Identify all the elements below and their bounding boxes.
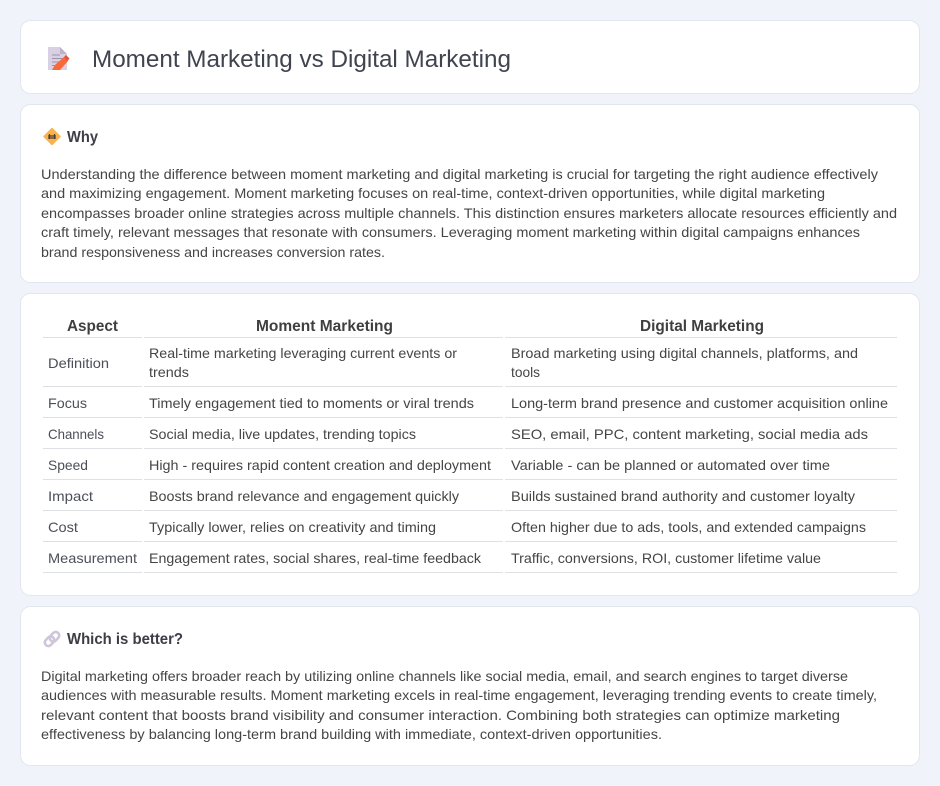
icon: document with pencil [48, 47, 70, 70]
table header: Digital Marketing [640, 318, 764, 335]
text block: which is better paragraph: effectiveness by balancing long-term brand building with immediate, context-driven opportunities. [41, 726, 662, 742]
text block: which is better paragraph: Digital marketing offers broader reach by utilizing online channels like social media, email, and search engines to target diverse [41, 668, 848, 684]
row: definition: trends [149, 364, 189, 380]
row: definition [48, 345, 858, 380]
row: definition: Definition [48, 355, 109, 371]
row: cost: Typically lower, relies on creativity and timing [149, 519, 436, 535]
text block: why paragraph: and maximizing engagement. Moment marketing focuses on real-time, context-driven opportunities, while digital marketing [41, 185, 825, 201]
row: measurement: Engagement rates, social shares, real-time feedback [149, 550, 482, 566]
row: impact: Builds sustained brand authority and customer loyalty [511, 488, 855, 504]
row: channels [48, 426, 868, 442]
row: focus: Timely engagement tied to moments or viral trends [149, 395, 474, 411]
text block: why paragraph: brand responsiveness and increases conversion rates. [41, 244, 385, 260]
table header: Moment Marketing [256, 318, 393, 335]
row: measurement: Traffic, conversions, ROI, customer lifetime value [511, 550, 821, 566]
row: speed [48, 457, 830, 473]
panel: why [20, 104, 920, 282]
icon: diamond sign [44, 128, 60, 144]
row: cost [48, 519, 866, 535]
row: definition: Broad marketing using digital channels, platforms, and [511, 345, 858, 361]
row: focus: Focus [48, 395, 87, 411]
panel: comparison table [20, 294, 920, 596]
row: impact [48, 488, 855, 504]
text block: which is better paragraph: audiences with measurable results. Moment marketing excels in real-time engagement, leveraging trending events to create timely, [41, 687, 877, 703]
text block: which is better paragraph [41, 668, 877, 742]
title: Moment Marketing vs Digital Marketing [92, 46, 511, 73]
row: impact: Boosts brand relevance and engagement quickly [149, 488, 459, 504]
heading: which is better: Which is better? [67, 631, 183, 648]
row: impact: Impact [48, 488, 93, 504]
row: speed: Variable - can be planned or automated over time [511, 457, 830, 473]
row: focus: Long-term brand presence and customer acquisition online [511, 395, 888, 411]
row: channels: Social media, live updates, trending topics [149, 426, 416, 442]
row: speed: Speed [48, 457, 88, 473]
table header: Aspect [67, 318, 119, 335]
text block: why paragraph: Understanding the difference between moment marketing and digital marketing is crucial for targeting the right audience effectively [41, 166, 878, 182]
table header [67, 318, 764, 335]
text block: which is better paragraph: relevant content that boosts brand visibility and consumer interaction. Combining both strategies can optimize marketing [41, 707, 840, 723]
heading: why: Why [67, 129, 98, 146]
text block: why paragraph: encompasses broader online strategies across multiple channels. This distinction ensures marketers allocate resources efficiently and [41, 205, 897, 221]
row: focus [48, 395, 888, 411]
row: measurement: Measurement [48, 550, 137, 566]
row: speed: High - requires rapid content creation and deployment [149, 457, 491, 473]
row: channels: Channels [48, 426, 104, 442]
icon: chain link [43, 631, 61, 647]
row: definition: tools [511, 364, 540, 380]
text block: why paragraph: craft timely, relevant messages that resonate with consumers. Leveraging moment marketing within digital campaigns enhances [41, 224, 860, 240]
row: definition: Real-time marketing leveraging current events or [149, 345, 457, 361]
row: channels: SEO, email, PPC, content marketing, social media ads [511, 426, 868, 442]
row: measurement [48, 550, 821, 566]
row: cost: Cost [48, 519, 78, 535]
text block: why paragraph [41, 166, 897, 260]
panel: title card [20, 20, 920, 94]
row: cost: Often higher due to ads, tools, and extended campaigns [511, 519, 866, 535]
panel: which is better [20, 606, 920, 766]
